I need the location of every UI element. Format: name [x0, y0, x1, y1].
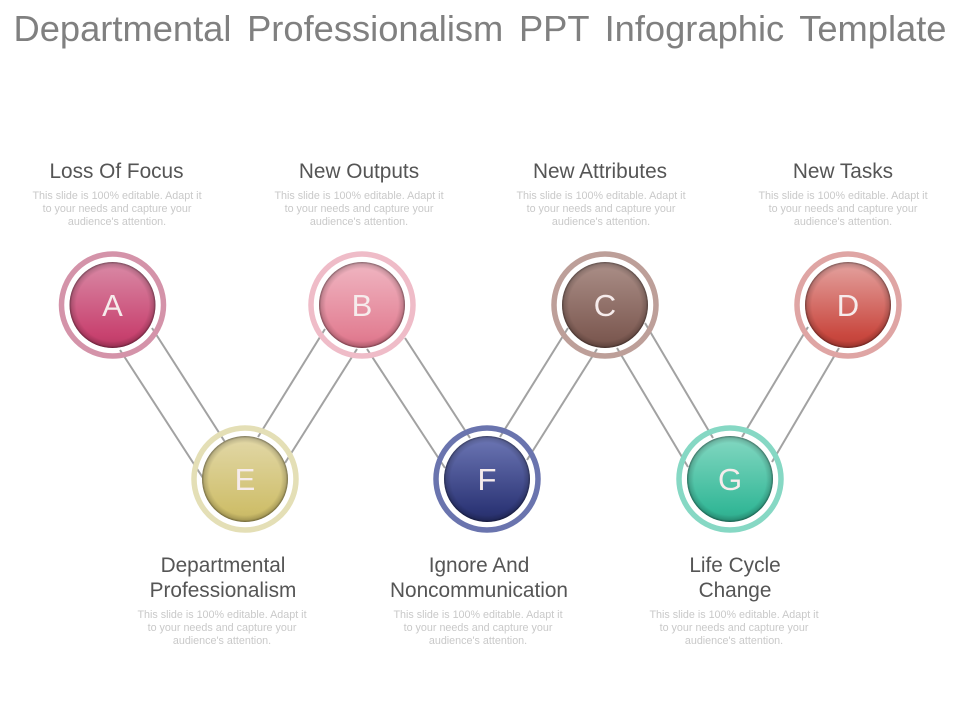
- panel: New Tasks text: to your needs and capture your: [769, 203, 918, 215]
- panel: Ignore And Noncommunication text: audience's attention.: [429, 635, 527, 647]
- panel: New Attributes text: audience's attention.: [552, 216, 650, 228]
- panel: Life Cycle Change text: [649, 554, 819, 647]
- panel: Departmental Professionalism text: audience's attention.: [173, 635, 271, 647]
- panel: Ignore And Noncommunication text: [390, 554, 568, 647]
- panel: Ignore And Noncommunication text: Noncommunication: [390, 579, 568, 602]
- node F: [436, 428, 538, 530]
- panel: Ignore And Noncommunication text: to your needs and capture your: [404, 622, 553, 634]
- panel: New Outputs text: This slide is 100% editable. Adapt it: [274, 190, 444, 202]
- node G: [679, 428, 781, 530]
- panel: Departmental Professionalism text: to your needs and capture your: [148, 622, 297, 634]
- node G: G: [718, 462, 742, 497]
- panel: Loss Of Focus text: This slide is 100% editable. Adapt it: [32, 190, 202, 202]
- panel: Departmental Professionalism text: Departmental: [161, 554, 285, 577]
- panel: Life Cycle Change text: This slide is 100% editable. Adapt it: [649, 609, 819, 621]
- panel: New Tasks text: New Tasks: [793, 160, 893, 183]
- panel: Ignore And Noncommunication text: Ignore And: [429, 554, 529, 577]
- panel: New Attributes text: This slide is 100% editable. Adapt it: [516, 190, 686, 202]
- title: Departmental Professionalism PPT Infographic Template: [14, 8, 946, 49]
- panel: Life Cycle Change text: to your needs and capture your: [660, 622, 809, 634]
- node F: F: [478, 462, 496, 497]
- panel: New Attributes text: to your needs and capture your: [527, 203, 676, 215]
- node C: [554, 254, 656, 356]
- panel: New Tasks text: This slide is 100% editable. Adapt it: [758, 190, 928, 202]
- panel: Loss Of Focus text: Loss Of Focus: [49, 160, 184, 183]
- node B: [311, 254, 413, 356]
- panel: Loss Of Focus text: [32, 160, 202, 228]
- node D: D: [837, 288, 859, 323]
- panel: Departmental Professionalism text: [137, 554, 307, 647]
- panel: New Outputs text: to your needs and capture your: [285, 203, 434, 215]
- node A: A: [102, 288, 123, 323]
- node D: [797, 254, 899, 356]
- panel: Departmental Professionalism text: Professionalism: [150, 579, 296, 602]
- panel: New Attributes text: [516, 160, 686, 228]
- panel: New Attributes text: New Attributes: [533, 160, 667, 183]
- panel: Life Cycle Change text: Life Cycle: [689, 554, 781, 577]
- node B: B: [352, 288, 372, 323]
- panel: New Outputs text: [274, 160, 444, 228]
- node E: [194, 428, 296, 530]
- panel: New Outputs text: New Outputs: [299, 160, 419, 183]
- panel: Life Cycle Change text: audience's attention.: [685, 635, 783, 647]
- panel: New Outputs text: audience's attention.: [310, 216, 408, 228]
- node C: C: [594, 288, 616, 323]
- panel: New Tasks text: audience's attention.: [794, 216, 892, 228]
- panel: Ignore And Noncommunication text: This slide is 100% editable. Adapt it: [393, 609, 563, 621]
- panel: New Tasks text: [758, 160, 928, 228]
- node A: [62, 254, 164, 356]
- panel: Life Cycle Change text: Change: [699, 579, 771, 602]
- connector lines: [120, 323, 839, 478]
- node E: E: [235, 462, 255, 497]
- panel: Loss Of Focus text: to your needs and capture your: [43, 203, 192, 215]
- panel: Loss Of Focus text: audience's attention.: [68, 216, 166, 228]
- panel: Departmental Professionalism text: This slide is 100% editable. Adapt it: [137, 609, 307, 621]
